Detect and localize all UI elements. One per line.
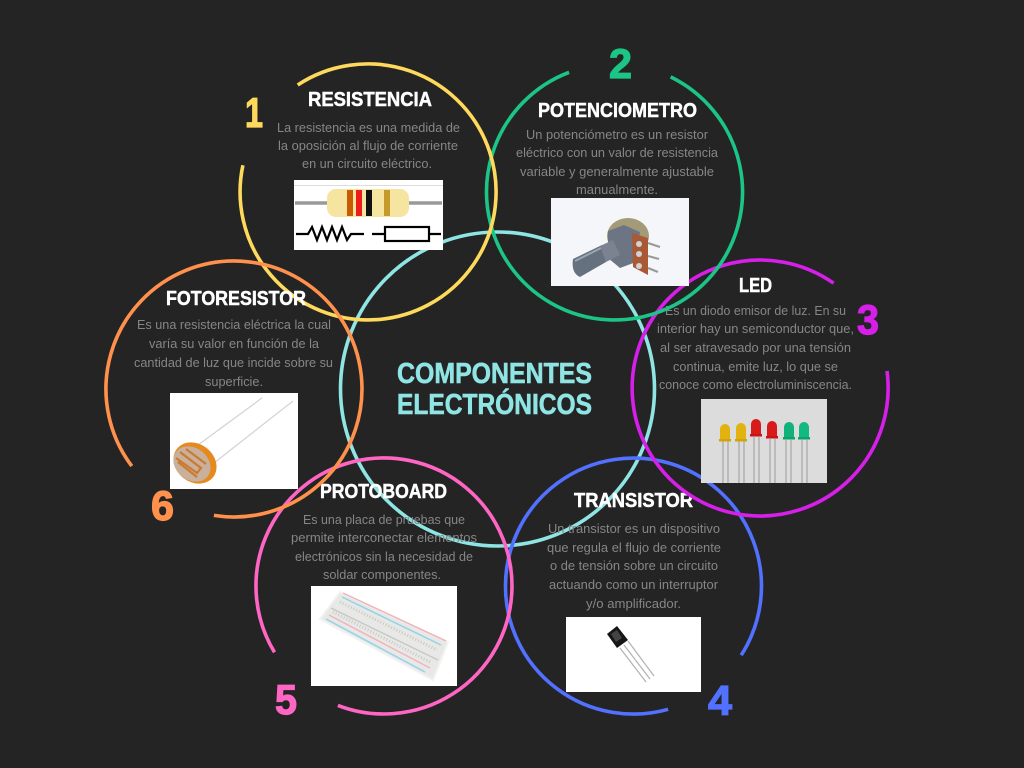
number 1: 1 [245,89,263,136]
text: LED description [657,303,854,392]
text: LED description: al ser atravesado por una tensión [660,340,851,355]
text: fotoresistor description: Es una resistencia eléctrica la cual [137,317,331,332]
number 5: 5 [275,676,297,723]
ring: LED [632,260,888,516]
heading: resistencia: RESISTENCIA [308,88,432,111]
text: potenciometro description: Un potenciómetro es un resistor [526,127,709,142]
text: transistor description [547,521,721,611]
text: transistor description: que regula el flujo de corriente [547,540,721,555]
ring: resistencia [240,64,496,320]
title: COMPONENTES [397,358,592,390]
heading: LED: LED [739,274,772,297]
text: resistencia description: la oposición al flujo de corriente [278,138,458,153]
text: potenciometro description: variable y generalmente ajustable [520,164,714,179]
text: resistencia description: La resistencia es una medida de [277,120,460,135]
text: fotoresistor description [134,317,333,389]
text: fotoresistor description: varía su valor en función de la [149,336,320,351]
panel: fotoresistor [106,261,362,529]
text: transistor description: y/o amplificador. [586,596,681,611]
text: potenciometro description: eléctrico con un valor de resistencia [516,145,719,160]
image: transistor [566,617,701,692]
panel: potenciometro [487,40,743,320]
panel: LED [632,260,888,516]
text: protoboard description: electrónicos sin la necesidad de [295,549,473,564]
number 2: 2 [609,40,632,87]
number 3: 3 [857,296,879,343]
image: potentiometer [551,198,689,286]
panel: protoboard [256,458,512,723]
heading: fotoresistor: FOTORESISTOR [166,287,306,310]
text: potenciometro description [516,127,719,197]
title [397,358,592,421]
text: protoboard description: soldar componentes. [323,567,441,582]
ring: potenciometro [487,72,743,320]
image: breadboard [311,586,457,686]
text: LED description: continua, emite luz, lo que se [673,359,838,374]
text: resistencia description [277,120,460,171]
ring: fotoresistor [106,261,362,517]
text: protoboard description: permite interconectar elementos [291,530,477,545]
heading: transistor: TRANSISTOR [574,489,693,512]
text: LED description: interior hay un semiconductor que, [657,321,854,336]
central circle [340,232,654,546]
text: transistor description: o de tensión sobre un circuito [550,558,718,573]
text: resistencia description: en un circuito eléctrico. [302,156,432,171]
text: fotoresistor description: cantidad de luz que incide sobre su [134,355,333,370]
text: fotoresistor description: superficie. [205,374,263,389]
image: resistor [294,180,443,250]
text: protoboard description: Es una placa de pruebas que [303,512,465,527]
title: ELECTRÓNICOS [397,389,592,421]
heading: protoboard: PROTOBOARD [320,480,447,503]
text: LED description: Es un diodo emisor de luz. En su [665,303,846,318]
text: LED description: conoce como electroluminiscencia. [659,377,852,392]
text: transistor description: Un transistor es un dispositivo [548,521,720,536]
text: transistor description: actuando como un interruptor [549,577,719,592]
text: protoboard description [291,512,477,582]
heading: potenciometro: POTENCIOMETRO [538,99,697,122]
image: photoresistor [165,393,298,492]
number 4: 4 [708,677,733,724]
number 6: 6 [151,482,174,529]
ring: transistor [505,458,761,714]
ring: protoboard [256,458,512,714]
panel: transistor [505,458,761,724]
text: potenciometro description: manualmente. [576,182,658,197]
image: LEDs [701,399,827,483]
panel: resistencia [240,64,496,320]
